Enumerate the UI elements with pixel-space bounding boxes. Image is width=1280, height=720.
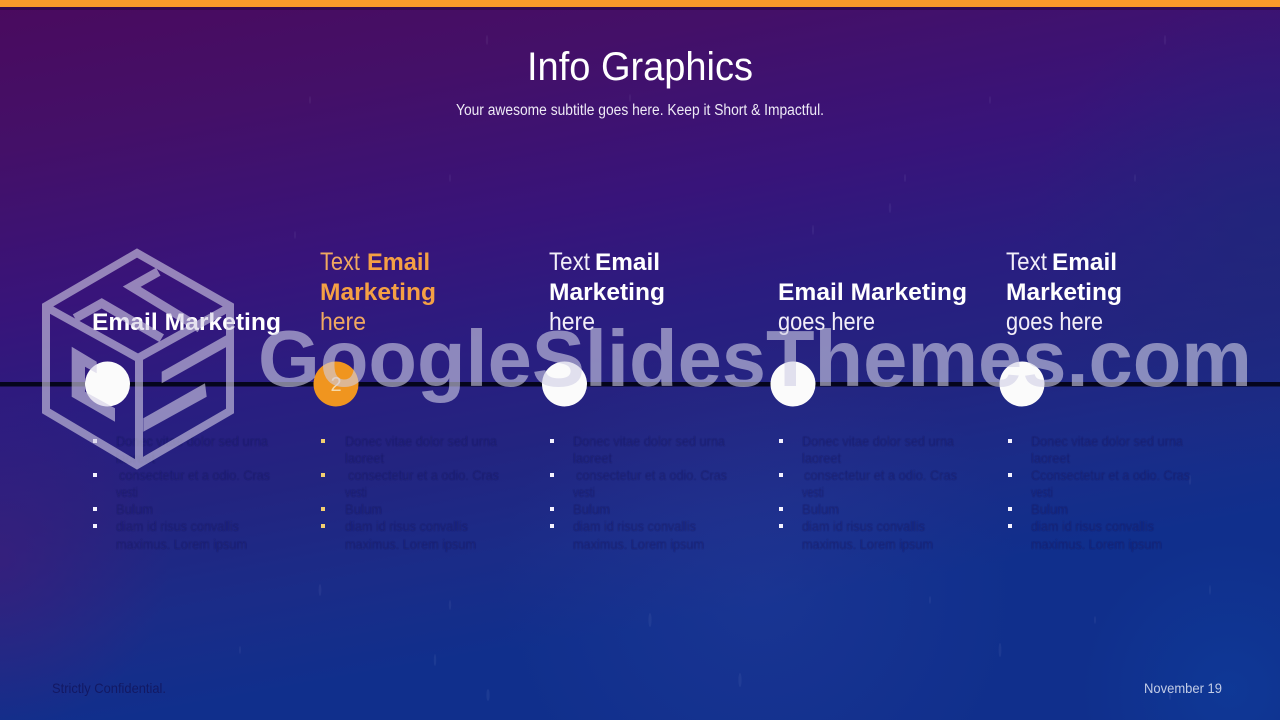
step 4 bullets: vesti [802, 484, 824, 500]
step 3 bullets: vesti [573, 484, 595, 500]
step 1 bullets: consectetur et a odio. Cras [119, 467, 270, 483]
step 3 heading: Marketing [549, 279, 665, 306]
step 5 heading: Marketing [1006, 279, 1122, 306]
step 1 marker [85, 362, 130, 406]
step 4 bullets [779, 433, 957, 552]
step 5 bullets: Donec vitae dolor sed urna [1031, 433, 1183, 449]
step 1 bullets [93, 433, 270, 552]
step 3 bullets: diam id risus convallis [573, 518, 696, 534]
step 3 bullets: Bulum [573, 501, 610, 517]
step 1 heading: Email Marketing [92, 309, 281, 336]
step 2 bullets: maximus. Lorem ipsum [345, 536, 476, 552]
step 1 bullets: vesti [116, 484, 138, 500]
step 5 bullets: Bulum [1031, 501, 1068, 517]
step 2 [314, 248, 499, 552]
step 1 bullets: diam id risus convallis [116, 518, 239, 534]
step 3 heading: here [549, 308, 595, 336]
step 3 bullets: consectetur et a odio. Cras [576, 467, 727, 483]
footer: date: November 19 [1144, 680, 1222, 696]
title: Info Graphics [527, 45, 753, 89]
step 4 bullets: consectetur et a odio. Cras [804, 467, 957, 483]
subtitle: Your awesome subtitle goes here. Keep it Short & Impactful. [456, 102, 824, 119]
step 2 heading: Text [320, 248, 360, 276]
step 2 bullets [321, 433, 499, 552]
step 2 heading: here [320, 308, 366, 336]
step 2 bullets: Donec vitae dolor sed urna [345, 433, 497, 449]
watermark text: GoogleSlidesThemes.com [258, 314, 1252, 403]
footer: confidentiality note: Strictly Confidential. [52, 680, 166, 696]
step 2 heading: Marketing [320, 279, 436, 306]
step 1 bullets: Bulum [116, 501, 153, 517]
step 5 bullets: maximus. Lorem ipsum [1031, 536, 1162, 552]
step 5 heading [1006, 248, 1122, 336]
step 2 heading [320, 248, 436, 336]
step 1 bullets: laoreet [116, 450, 155, 466]
step 4 heading: Email Marketing [778, 279, 967, 306]
step 2 bullets: laoreet [345, 450, 384, 466]
step 2 marker [314, 362, 358, 406]
step 3 marker [542, 362, 587, 406]
step 2 marker: 2 [330, 374, 342, 396]
step 4 [770, 279, 967, 552]
step 5 [1000, 248, 1190, 552]
step 2 bullets: Bulum [345, 501, 382, 517]
step 5 bullets [1008, 433, 1190, 552]
step 2 bullets: diam id risus convallis [345, 518, 468, 534]
step 1 bullets: maximus. Lorem ipsum [116, 536, 247, 552]
step 5 heading: goes here [1006, 308, 1103, 336]
step 2 heading: Email [367, 249, 430, 276]
step 4 bullets: diam id risus convallis [802, 518, 925, 534]
step 5 heading: Text [1006, 248, 1047, 276]
step 3 bullets: Donec vitae dolor sed urna [573, 433, 725, 449]
step 5 bullets: laoreet [1031, 450, 1070, 466]
step 4 bullets: maximus. Lorem ipsum [802, 536, 933, 552]
step 1 [85, 309, 281, 552]
step 3 heading: Text [549, 248, 590, 276]
step 4 bullets: Donec vitae dolor sed urna [802, 433, 954, 449]
step 3 heading [549, 248, 665, 336]
step 3 [542, 248, 727, 552]
step 3 bullets [550, 433, 727, 552]
step 5 bullets: vesti [1031, 484, 1053, 500]
step 3 heading: Email [595, 249, 660, 276]
step 4 marker [770, 362, 816, 406]
step 5 bullets: Cconsectetur et a odio. Cras [1031, 467, 1190, 483]
step 5 heading: Email [1052, 249, 1117, 276]
step 4 heading: goes here [778, 308, 875, 336]
timeline line [0, 382, 1280, 386]
top accent bar [0, 0, 1280, 7]
step 2 bullets: consectetur et a odio. Cras [348, 467, 499, 483]
step 5 marker [1000, 362, 1044, 406]
step 4 bullets: Bulum [802, 501, 839, 517]
step 4 heading [778, 279, 967, 336]
step 5 bullets: diam id risus convallis [1031, 518, 1154, 534]
step 4 bullets: laoreet [802, 450, 841, 466]
step 3 bullets: maximus. Lorem ipsum [573, 536, 704, 552]
step 3 bullets: laoreet [573, 450, 612, 466]
step 1 bullets: Donec vitae dolor sed urna [116, 433, 268, 449]
step 2 bullets: vesti [345, 484, 367, 500]
watermark logo: hexagonal cube [46, 253, 230, 465]
